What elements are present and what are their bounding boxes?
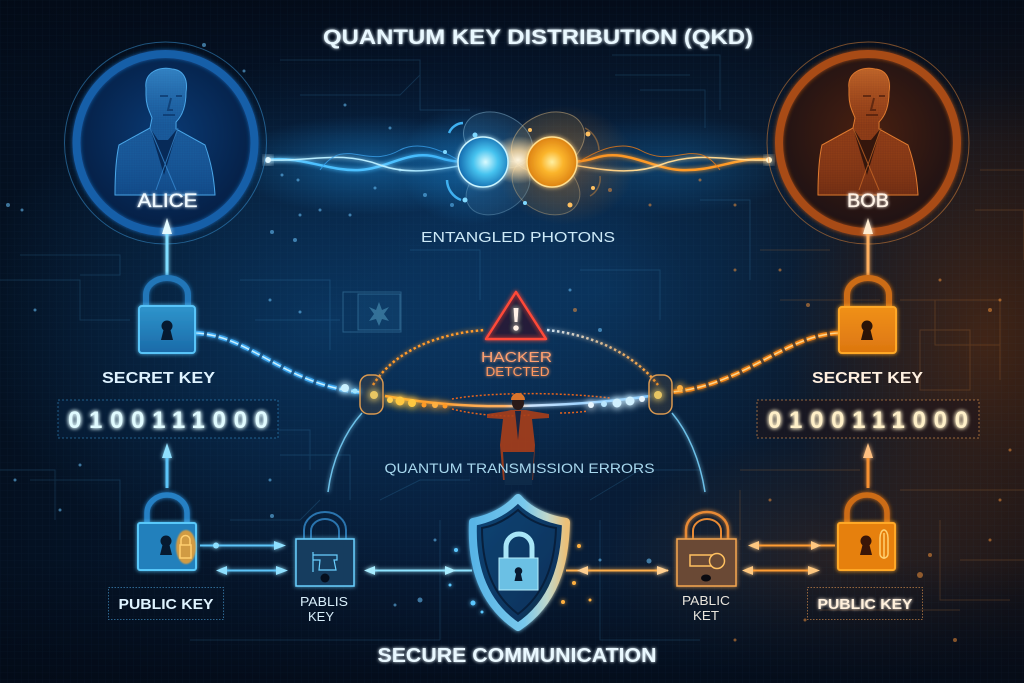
icon: Alice secret key lock — [139, 278, 195, 353]
label: right middle key — [682, 594, 730, 623]
footer label: secure communication: SECURE COMMUNICATION — [378, 645, 656, 667]
lower blue arcs — [328, 413, 705, 492]
dotted detection arc left — [373, 330, 485, 385]
panel: right public key label: PUBLIC KEY — [818, 596, 912, 613]
arrow: Bob public key to secret key — [863, 443, 873, 488]
label: Bob secret key: SECRET KEY — [812, 370, 924, 387]
left interceptor capsule — [360, 375, 383, 414]
icon: secure communication shield — [448, 498, 592, 627]
arrow: secret key to Bob — [863, 218, 873, 276]
text: hacker detected — [481, 349, 552, 379]
right interceptor capsule — [649, 375, 672, 414]
panel: interception — [328, 330, 705, 492]
blue photon — [458, 137, 508, 187]
label: entangled photons: ENTANGLED PHOTONS — [421, 229, 615, 246]
label: quantum transmission errors: QUANTUM TRANSMISSION ERRORS — [384, 460, 654, 476]
icon: Bob public key lock — [838, 495, 895, 570]
orange photon — [527, 137, 577, 187]
panel: Bob binary key — [757, 400, 979, 438]
Bob name: BOB — [847, 191, 889, 212]
panel: Bob binary key: 0100111000 — [768, 407, 968, 434]
dotted detection arc right — [547, 330, 658, 385]
quantum wire — [385, 396, 650, 406]
label: left middle key: PABLIS — [300, 595, 348, 609]
icon: left middle lock — [296, 512, 354, 586]
arrow: Alice public key to secret key — [162, 443, 172, 488]
panel: Alice binary key — [58, 400, 278, 438]
Alice hologram figure — [115, 68, 215, 195]
wire: Bob secret key to interceptor — [672, 333, 839, 392]
panel: Alice binary key: 0100111000 — [68, 407, 268, 434]
label: right middle key: PABLIC — [682, 594, 730, 608]
shield padlock — [499, 534, 538, 590]
Bob hologram figure — [818, 68, 918, 195]
arrow: secret key to Alice — [162, 218, 172, 276]
arrow: shield to right lock — [566, 566, 669, 575]
label: right middle key: KET — [693, 609, 719, 623]
icon: Alice public key lock — [138, 495, 196, 570]
text: hacker detected: DETCTED — [486, 364, 550, 379]
title: QUANTUM KEY DISTRIBUTION (QKD) — [323, 26, 753, 49]
icon: right middle lock — [677, 512, 736, 586]
quantum link: wave between Alice and Bob — [265, 146, 772, 171]
label: left middle key — [300, 595, 348, 624]
panel: Alice avatar — [64, 42, 266, 244]
panel: left public key label: PUBLIC KEY — [118, 596, 214, 613]
panel: right public key label — [808, 588, 922, 620]
photon beads — [341, 384, 683, 408]
label: left middle key: KEY — [308, 610, 335, 624]
small chip icon — [343, 292, 401, 332]
icon: Bob secret key lock — [839, 278, 896, 353]
photon orbitals — [447, 101, 600, 227]
panel: Bob avatar — [767, 42, 969, 244]
text: hacker detected: HACKER — [481, 349, 552, 366]
label: Alice secret key: SECRET KEY — [102, 370, 216, 387]
icon: hacker figure — [487, 393, 549, 485]
arrow: left lock to shield — [364, 566, 472, 575]
centre flare — [488, 136, 548, 184]
icon: hacker warning triangle — [486, 292, 546, 339]
photon haze — [400, 105, 635, 225]
panel: left public key label — [108, 588, 224, 620]
arrows: Alice public key exchange — [200, 541, 288, 575]
arrows: Bob public key exchange — [742, 541, 835, 575]
entangled photons — [400, 101, 635, 227]
Alice name: ALICE — [138, 191, 198, 212]
wire: Alice secret key to interceptor — [195, 333, 360, 392]
